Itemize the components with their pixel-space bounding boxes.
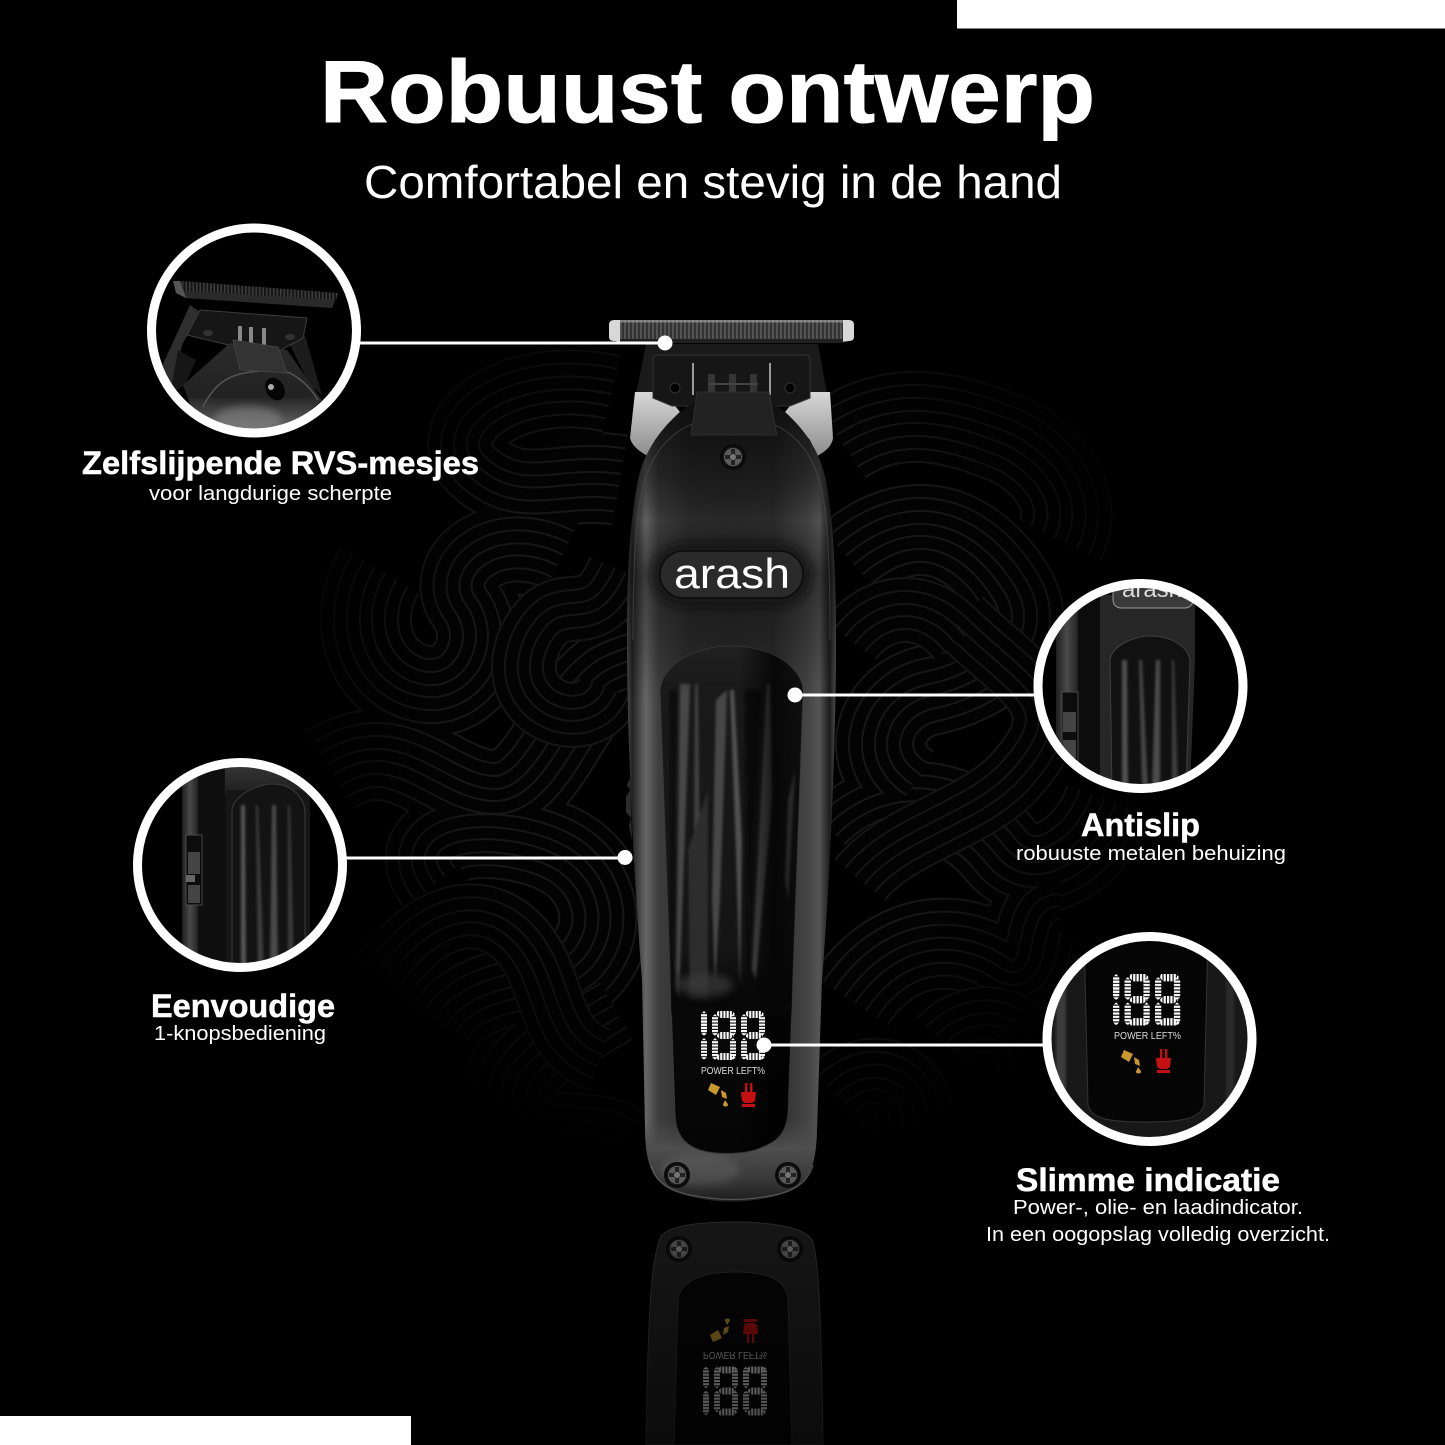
white bar top right	[957, 0, 1445, 28]
label: display: Power-, olie- en laadindicator.	[1013, 1197, 1303, 1219]
trimmer product	[609, 320, 854, 1202]
icon: plug	[741, 1083, 756, 1107]
neck	[691, 392, 777, 435]
label: grip	[1016, 807, 1286, 865]
reflection display panel	[674, 1272, 792, 1445]
label: button: 1-knopsbediening	[154, 1023, 326, 1045]
label: blades: Zelfslijpende RVS-mesjes	[82, 445, 479, 481]
circle: display detail: POWER LEFT%	[1114, 1030, 1181, 1042]
logo badge: arash	[674, 550, 790, 597]
reflection icons	[710, 1318, 758, 1343]
white bar bottom left	[0, 1416, 411, 1445]
label: display: In een oogopslag volledig overzicht.	[986, 1224, 1330, 1246]
reflection screws	[666, 1236, 803, 1262]
label: button	[151, 988, 335, 1045]
circle: display detail	[1046, 930, 1254, 1150]
circle: blades detail	[151, 228, 357, 434]
connector: blades	[360, 336, 672, 350]
connector: grip	[788, 688, 1035, 702]
title: Robuust ontwerp	[320, 42, 1095, 141]
reflection digits	[703, 1366, 767, 1416]
display digits	[701, 1011, 765, 1060]
trimmer body	[627, 400, 836, 1202]
circle: grip detail: arash	[1122, 576, 1182, 602]
logo badge	[650, 542, 813, 608]
display label: POWER LEFT%	[701, 1066, 765, 1077]
label: button: Eenvoudige	[151, 988, 335, 1024]
circle: grip detail	[1038, 570, 1244, 790]
label: display	[986, 1162, 1330, 1246]
trimmer reflection	[646, 1222, 823, 1445]
label: grip: Antislip	[1081, 807, 1200, 843]
reflection label: POWER LEFT%	[703, 1349, 767, 1361]
subtitle: Comfortabel en stevig in de hand	[364, 156, 1062, 208]
side button	[626, 778, 632, 840]
label: display: Slimme indicatie	[1016, 1162, 1280, 1198]
background wave pattern	[330, 395, 1110, 1150]
connector: button	[346, 850, 632, 865]
connector: display	[756, 1038, 1044, 1052]
label: grip: robuuste metalen behuizing	[1016, 843, 1286, 865]
screw top	[720, 444, 746, 470]
blade assembly	[609, 320, 854, 456]
icon: oil	[708, 1083, 728, 1106]
label: blades	[82, 445, 479, 505]
label: blades: voor langdurige scherpte	[149, 483, 392, 505]
circle: button detail	[137, 755, 343, 975]
screws bottom	[664, 1162, 801, 1188]
reflection body	[646, 1222, 823, 1445]
